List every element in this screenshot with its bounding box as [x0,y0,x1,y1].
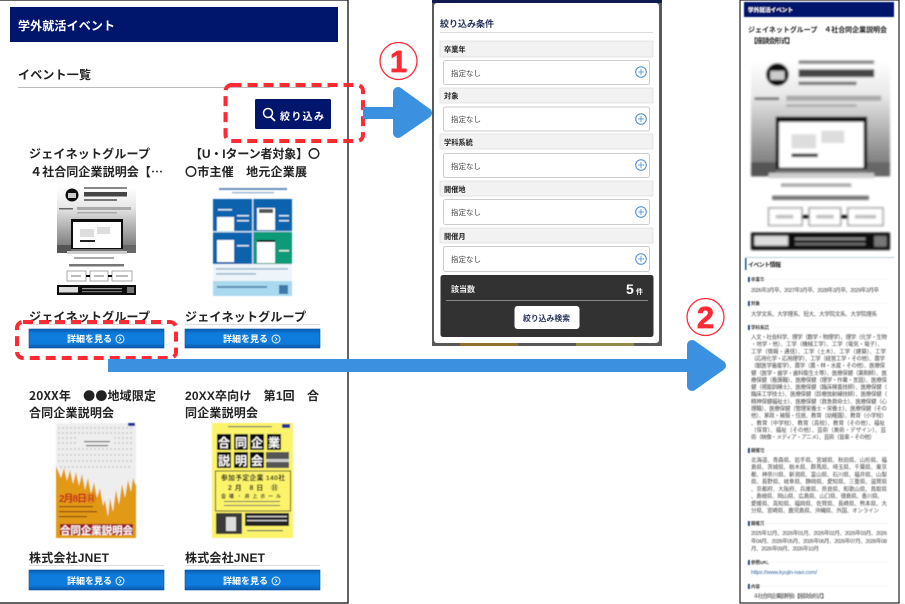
detail info: 健（視能訓練士）、医療保健（臨床検査技師）、医療保健（ [751,383,887,391]
filter row: 卒業年 [440,41,653,84]
detail button 4 [185,570,320,590]
detail info: 卒業年 [751,276,765,283]
results bar: 5 [626,281,634,297]
event card 3: 株式会社JNET [29,550,110,565]
thumbnail: orange poster: 合同企業説明会 [60,524,134,537]
filter row: 開催地: 開催地 [444,185,466,194]
detail info: 2025年12月、2026年01月、2026年02月、2026年03月、2026 [751,529,887,537]
thumbnail: yellow poster: 明 [235,454,247,468]
detail info: 北海道、青森県、岩手県、宮城県、秋田県、山形県、福 [751,456,887,464]
heading bar: 学外就活イベント [10,7,338,42]
detail info: （獣医学畜産学）、農学（農・林・水産・その他）、医療保 [751,362,885,370]
filter row: 開催月: 指定なし [451,254,481,264]
heading bar: 学外就活イベント: 学外就活イベント [18,18,115,33]
filter row: 卒業年: 指定なし [451,68,481,78]
event card 2: ジェイネットグループ [185,309,306,324]
thumbnail: yellow poster: 参加予定企業 140社 [221,473,285,482]
event card 2: 〇市主催 地元企業展 [185,164,307,179]
detail button 1: 詳細を見る [67,333,112,344]
detail info: イベント情報 [748,261,781,269]
detail button 3: 詳細を見る [67,575,112,586]
detail info: 分県、宮崎県、鹿児島県、沖縄県、外国、オンライン [751,507,879,515]
step number 2 [687,298,724,336]
detail poster [751,61,890,250]
detail button 4: 詳細を見る [223,575,268,586]
filter row: 対象: 対象 [444,92,458,100]
thumbnail: yellow poster: 会場・井上ホール [221,493,281,500]
step number 1 [380,42,417,80]
detail info [745,257,894,600]
detail button 1 [29,329,164,348]
filter row: 学科系統 [440,134,653,178]
detail heading bar: 学外就活イベント [748,6,793,14]
arrow: to event detail [108,345,721,386]
event card 1: ジェイネットグループ [29,146,150,161]
thumbnail: orange poster: 2月8日㊐ [59,493,96,505]
detail info: 他）、家政・被服・住居、教育（幼稚園）、教育（小学校） [751,412,887,420]
filter row: 開催地 [440,181,653,224]
detail button 3 [29,570,164,590]
results bar: 絞り込み検索 [523,313,570,323]
detail info: 開催地 [751,447,765,454]
step number 1: 1 [390,44,407,79]
detail info: （保育）、福祉（その他）、芸術（美術・デザイン）、芸 [751,426,886,434]
thumbnail: blue poster [213,188,292,296]
event card 3: 合同企業説明会 [29,405,114,420]
event card 1 [29,146,164,325]
detail button 2 [185,329,320,348]
detail title: 【座談会形式】 [750,36,794,45]
thumbnail: orange poster [56,423,136,538]
event card 4: 同企業説明会 [185,405,258,420]
event card 3: 20XX年 ●●地域限定 [29,387,156,404]
callout: filter button highlight [226,85,363,141]
detail info: 月、2026年09月、2026年10月 [751,544,819,552]
event card 3 [29,387,164,566]
event card 4: 株式会社JNET [185,550,266,565]
heading: イベント一覧: イベント一覧 [18,67,91,82]
callout: detail button highlight [17,322,176,358]
panel: filter modal [432,0,662,346]
detail info: 県、長野県、岐阜県、静岡県、愛知県、三重県、滋賀県 [751,478,887,486]
detail info: 、教育（中学校）、教育（高校）、教育（その他）、福祉 [751,419,885,427]
thumbnail: yellow poster: 業 [268,435,280,450]
detail info: 精神保健福祉士）、医療保健（救急救命士）、医療保健（心 [751,397,887,405]
detail info: 大学文系、大学理系、短大、大学院文系、大学院理系 [751,310,877,318]
results bar: 件 [636,287,643,296]
detail info: 開催月 [751,520,764,527]
filter row: 開催月 [440,228,653,272]
filter button: 絞り込み [280,110,324,123]
detail info: 年04月、2026年05月、2026年06月、2026年07月、2026年08 [751,537,887,545]
detail info: 健（医学・歯学・歯科衛生士等）、医療保健（薬剤師）、医 [751,369,887,377]
detail info: ４社合同企業説明会【座談会形式】 [753,592,827,600]
detail info: 参照URL [751,559,769,566]
detail info: 2026年3月卒、2027年3月卒、2028年3月卒、2029年3月卒 [751,286,879,294]
detail title [748,25,887,45]
detail info: 対象 [751,300,760,307]
detail info: 理職）、医療保健（管理栄養士・栄養士）、医療保健（その [751,404,887,412]
detail info: ・地学・他）、工学（機械工学）、工学（電気・電子）、 [751,340,883,348]
thumbnail: yellow poster: 合 [218,435,230,450]
detail info: 療保健（看護職）、医療保健（理学・作業・言語）、医療保 [751,376,887,384]
detail info: 島県、茨城県、栃木県、群馬県、埼玉県、千葉県、東京 [751,463,887,471]
detail info: 人文・社会科学、理学（数学・物理学）、理学（化学・生物 [751,333,887,341]
filter row: 学科系統: 指定なし [451,161,481,171]
filter row: 開催月: 開催月 [444,232,466,241]
event card 1: ４社合同企業説明会【… [30,163,163,180]
detail heading bar [744,2,894,17]
detail title: ジェイネットグループ ４社合同企業説明会 [748,25,887,34]
panel: event list [0,0,348,603]
event card 2 [185,146,320,325]
filter row: 卒業年: 卒業年 [444,45,466,54]
step number 2: 2 [697,300,714,335]
thumbnail: yellow poster: 会 [251,453,263,468]
thumbnail: yellow poster [212,423,293,538]
results bar [440,275,654,337]
event card 1: ジェイネットグループ [29,309,150,324]
detail info: 、京都府、大阪府、兵庫県、奈良県、和歌山県、鳥取県 [751,485,887,493]
filter row: 対象: 指定なし [451,114,481,124]
arrow: to filter modal [363,92,427,133]
results bar: 該当数 [451,284,475,294]
filter row: 対象 [440,88,653,131]
detail info: 術（映像・メディア・アニメ）、芸術（音楽・その他） [751,433,875,441]
detail info: 都、神奈川県、新潟県、富山県、石川県、福井県、山梨 [751,470,887,478]
detail info: 、島根県、岡山県、広島県、山口県、徳島県、香川県、 [751,492,883,500]
detail info: （応用化学・応用理学）、工学（経営工学・その他）、農学 [751,354,885,362]
detail info: 愛媛県、高知県、福岡県、佐賀県、長崎県、熊本県、大 [751,499,887,507]
thumbnail: yellow poster: 企 [251,435,263,450]
modal heading: 絞り込み条件 [440,18,494,29]
detail button 2: 詳細を見る [223,333,268,344]
detail info: 臨床工学技士）、医療保健（診療放射線技師）、医療保健（ [751,390,887,398]
panel: event detail [740,0,899,603]
filter button [255,99,331,129]
thumbnail: yellow poster: 同 [235,436,247,450]
filter row: 開催地: 指定なし [451,207,481,217]
event card 4: 20XX卒向け 第1回 合 [185,388,319,403]
event card 4 [185,388,320,566]
thumbnail: yellow poster: 説 [218,453,230,468]
detail info: 学科系統 [751,324,769,331]
detail info: 内容 [751,583,760,590]
filter row: 学科系統: 学科系統 [444,138,474,147]
detail info: 工学（情報・通信）、工学（土木）、工学（建築）、工学 [751,347,886,355]
detail info: https://www.kyujin-navi.com/ [751,570,817,576]
thumbnail: yellow poster: 2月 8日 ㊐ [228,484,278,492]
event card 2: 【U・Iターン者対象】〇 [190,146,320,161]
